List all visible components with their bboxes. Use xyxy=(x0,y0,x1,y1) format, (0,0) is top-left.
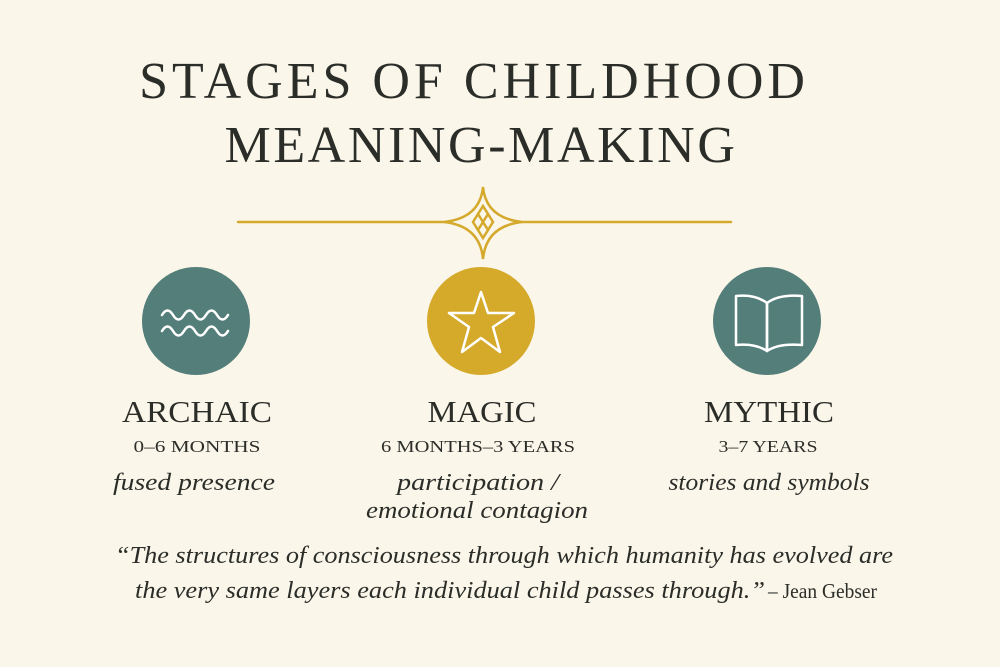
stage: archaic: fused presence xyxy=(113,470,275,496)
divider with star ornament xyxy=(238,187,731,259)
stage: magic xyxy=(366,394,588,524)
stage: mythic: MYTHIC xyxy=(704,394,834,429)
title: MEANING-MAKING xyxy=(224,117,738,174)
icon: mythic book xyxy=(713,267,821,375)
stage: archaic xyxy=(113,394,275,496)
stage: archaic: ARCHAIC xyxy=(122,394,272,429)
stage: mythic: stories and symbols xyxy=(668,470,870,496)
stage: magic: participation / xyxy=(395,470,562,496)
stage: magic: 6 MONTHS–3 YEARS xyxy=(381,437,575,456)
icon: magic star xyxy=(427,267,535,375)
stage: mythic: 3–7 YEARS xyxy=(718,437,818,456)
icon: archaic waves xyxy=(142,267,250,375)
quote: the very same layers each individual child passes through.” xyxy=(135,578,765,604)
quote xyxy=(115,543,893,604)
quote: – Jean Gebser xyxy=(767,579,877,603)
stage: magic: MAGIC xyxy=(428,394,536,429)
stage: magic: emotional contagion xyxy=(366,498,588,524)
stage: archaic: 0–6 MONTHS xyxy=(134,437,260,456)
title xyxy=(139,53,809,174)
stage: mythic xyxy=(668,394,870,496)
title: STAGES OF CHILDHOOD xyxy=(139,53,809,110)
quote: “The structures of consciousness through which humanity has evolved are xyxy=(115,543,893,569)
